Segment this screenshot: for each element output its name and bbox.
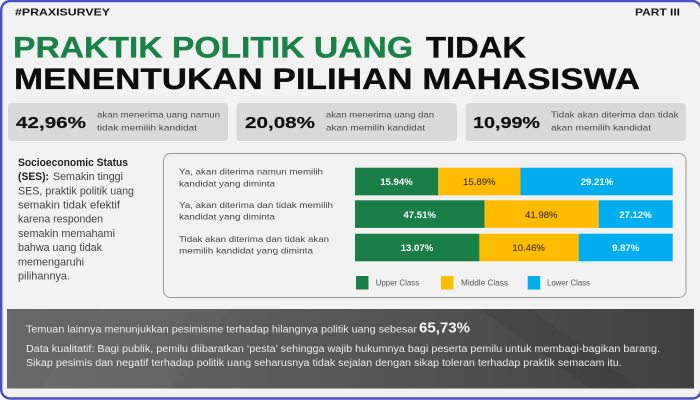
panel: findings xyxy=(7,309,694,388)
question labels xyxy=(179,166,333,256)
legend: Lower Class xyxy=(547,279,590,288)
stacked bar: row 2: 41.98% xyxy=(525,210,558,221)
panel: chart xyxy=(164,154,686,298)
stacked bar: row 3 xyxy=(355,234,673,261)
stacked bar: row 1 xyxy=(355,168,673,195)
question labels: kandidat yang diminta xyxy=(179,212,275,222)
question labels: memilih kandidat yang diminta xyxy=(179,246,313,256)
socioeconomic status text block: memengaruhi xyxy=(18,256,84,268)
question labels: Tidak akan diterima dan tidak akan xyxy=(179,234,329,244)
socioeconomic status text block: semakin tidak efektif xyxy=(18,200,120,212)
stacked bar: row 1: 15.94% xyxy=(380,177,413,188)
legend: Upper Class xyxy=(376,279,419,288)
stat card: 42,96% xyxy=(8,103,228,141)
title: PRAKTIK POLITIK UANG xyxy=(13,31,413,64)
qualitative data text xyxy=(26,344,660,369)
qualitative data text: Sikap pesimis dan negatif terhadap politik uang seharusnya tidak sejalan dengan sikap toleran terhadap praktik semacam itu. xyxy=(26,358,622,369)
stat card: 10,99%: 10,99% xyxy=(473,115,540,132)
socioeconomic status text block: semakin memahami xyxy=(18,228,115,240)
finding headline: 65,73% xyxy=(419,320,470,336)
stacked bar: row 3: 10.46% xyxy=(512,243,545,254)
stacked bar: row 3: 9.87% xyxy=(612,243,640,254)
stat card: 20,08%: akan menerima uang dan xyxy=(326,109,434,119)
stat card: 10,99%: Tidak akan diterima dan tidak xyxy=(551,109,679,119)
title: MENENTUKAN PILIHAN MAHASISWA xyxy=(14,63,640,96)
stat card: 42,96%: 42,96% xyxy=(16,115,86,132)
question labels: kandidat yang diminta xyxy=(179,178,275,188)
legend xyxy=(356,276,590,290)
finding headline xyxy=(26,320,470,336)
part label: PART III xyxy=(635,7,680,19)
stacked bar: row 1: 15.89% xyxy=(463,177,496,188)
stacked bar: row 2: 47.51% xyxy=(403,210,436,221)
finding headline: Temuan lainnya menunjukkan pesimisme terhadap hilangnya politik uang sebesar xyxy=(26,324,418,336)
stat card: 20,08%: 20,08% xyxy=(245,115,315,132)
stacked bar: row 2 xyxy=(355,200,673,228)
stacked bar: row 1: 29.21% xyxy=(581,177,614,188)
title xyxy=(13,31,640,96)
socioeconomic status text block: Socioeconomic Status xyxy=(18,157,128,169)
stacked bar: row 3: 13.07% xyxy=(401,243,434,254)
socioeconomic status text block: pilihannya. xyxy=(18,270,70,282)
qualitative data text: Data kualitatif: Bagi publik, pemilu diibaratkan ‘pesta’ sehingga wajib hukumnya bagi peserta pemilu untuk membagi-bagikan barang. xyxy=(26,344,660,355)
socioeconomic status text block: Semakin tinggi xyxy=(53,171,123,183)
title: TIDAK xyxy=(426,31,526,64)
stat card: 20,08%: akan memilih kandidat xyxy=(326,123,426,133)
stat card: 10,99% xyxy=(466,103,686,141)
question labels: Ya, akan diterima dan tidak memilih xyxy=(179,200,333,210)
stat card: 10,99%: akan memilih kandidat xyxy=(551,123,652,133)
socioeconomic status text block: bahwa uang tidak xyxy=(18,242,103,254)
question labels: Ya, akan diterima namun memilih xyxy=(179,166,323,176)
stat card: 42,96%: akan menerima uang namun xyxy=(97,109,220,119)
stat card: 42,96%: tidak memilih kandidat xyxy=(97,123,198,133)
stacked bar: row 2: 27.12% xyxy=(619,210,652,221)
socioeconomic status text block xyxy=(18,157,134,282)
legend: Middle Class xyxy=(461,279,508,288)
hashtag label: #PRAXISURVEY xyxy=(15,7,110,19)
socioeconomic status text block: (SES): xyxy=(18,171,49,183)
stat card: 20,08% xyxy=(236,103,457,141)
socioeconomic status text block: SES, praktik politik uang xyxy=(18,185,134,197)
socioeconomic status text block: karena responden xyxy=(18,214,103,226)
